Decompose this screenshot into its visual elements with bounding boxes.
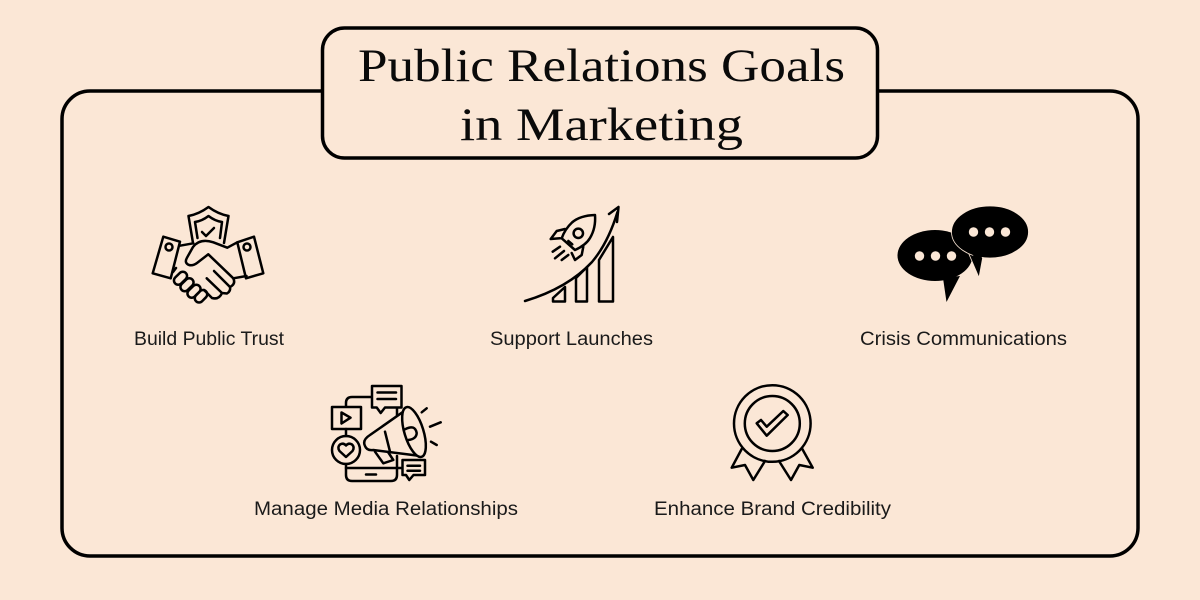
icon: phone with megaphone (332, 386, 441, 481)
goal: build public trust (134, 207, 285, 350)
goal: crisis communications (860, 206, 1067, 350)
title line one: Public Relations Goals (358, 40, 845, 92)
goal: enhance brand credibility (654, 385, 892, 520)
label: enhance brand credibility: Enhance Brand Credibility (654, 499, 892, 520)
icon: handshake with shield (153, 207, 263, 304)
label: manage media relationships: Manage Media Relationships (254, 499, 518, 520)
goal: manage media relationships (254, 386, 518, 520)
title panel (322, 28, 878, 158)
panel: outer frame (62, 91, 1138, 556)
icon: rocket and growth chart (525, 207, 618, 302)
label: build public trust: Build Public Trust (134, 329, 285, 350)
icon: award badge with check (732, 385, 813, 480)
title line two: in Marketing (460, 99, 743, 151)
icon: speech bubbles (898, 206, 1028, 302)
goal: support launches (490, 207, 653, 350)
label: support launches: Support Launches (490, 329, 653, 350)
label: crisis communications: Crisis Communications (860, 329, 1067, 350)
